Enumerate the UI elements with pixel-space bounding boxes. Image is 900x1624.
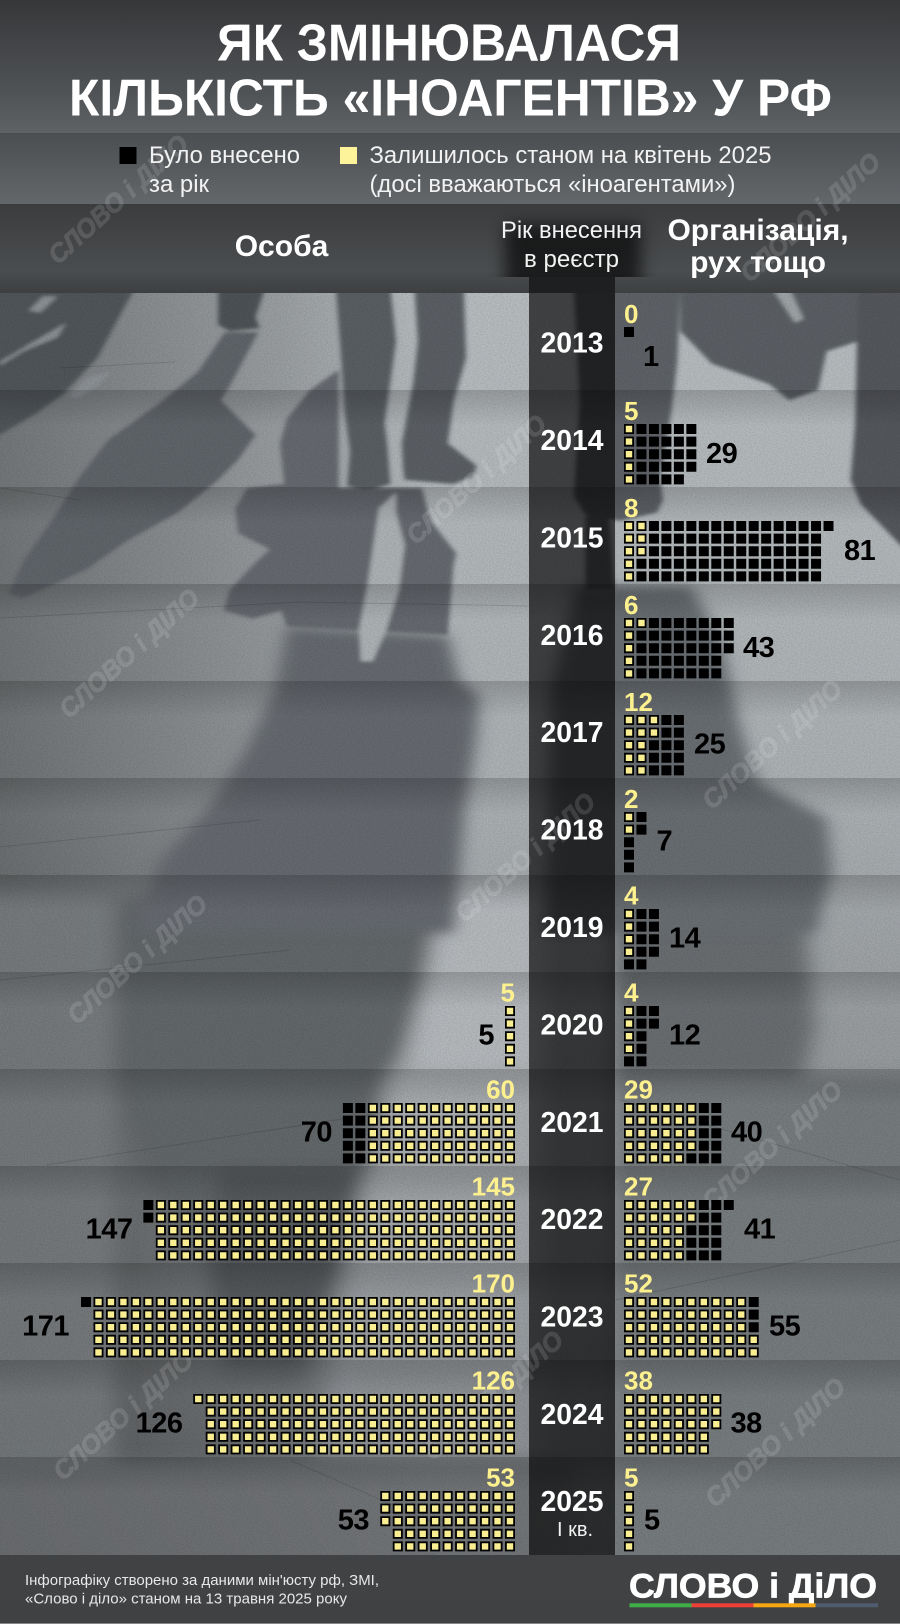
watermarks: СЛОВО і ДІЛО: [699, 1372, 851, 1513]
row 2021: 2021: [540, 1107, 604, 1139]
row 2021: 60: [486, 1074, 515, 1104]
persons squares 2021: [342, 1108, 515, 1158]
year column spine: [529, 293, 615, 1555]
row 2014: 2014: [540, 425, 604, 457]
row 2022: 27: [624, 1172, 653, 1202]
organisations squares 2018: [624, 817, 647, 867]
watermarks: СЛОВО і ДІЛО: [449, 787, 601, 928]
organisations squares 2023: [624, 1302, 759, 1352]
row 2013: 1: [643, 341, 659, 373]
row 2025 Q1: [338, 1462, 660, 1546]
organisations squares 2025: [624, 1496, 634, 1546]
row 2014: 5: [624, 396, 638, 426]
column header: person: Особа: [235, 230, 329, 263]
lower photo shadows: [0, 892, 900, 1582]
row 2023: 170: [472, 1268, 515, 1298]
row 2024: 126: [136, 1408, 183, 1440]
row 2017: 25: [694, 728, 726, 760]
title: КІЛЬКІСТЬ «ІНОАГЕНТІВ» У РФ: [69, 70, 832, 128]
watermarks: СЛОВО і ДІЛО: [42, 129, 194, 270]
column header: year of registry entry: Рік внесення: [501, 217, 642, 244]
row 2019: 2019: [540, 912, 604, 944]
organisations squares 2020: [624, 1011, 659, 1061]
legend: [120, 142, 772, 198]
row 2018: 2018: [540, 815, 604, 847]
persons squares 2025: [380, 1496, 515, 1546]
row 2025 Q1: 53: [486, 1462, 515, 1492]
organisations squares 2024: [624, 1399, 722, 1449]
legend panel background: [0, 133, 900, 204]
row 2021: 40: [731, 1116, 762, 1148]
row 2020: 4: [624, 978, 639, 1008]
footer source note: «Слово і діло» станом на 13 травня 2025 року: [25, 1590, 347, 1608]
row 2020: 5: [501, 978, 515, 1008]
title: ЯК ЗМІНЮВАЛАСЯ: [217, 14, 681, 72]
row 2013: [540, 299, 659, 373]
persons squares 2022: [143, 1205, 515, 1255]
legend key: remaining as of April 2025: (досі вважаються «іноагентами»): [370, 171, 736, 198]
title panel background: [0, 0, 900, 133]
row 2021: 29: [624, 1074, 653, 1104]
chart rows: [22, 299, 876, 1546]
row 2020: 5: [478, 1020, 494, 1052]
row 2020: 12: [669, 1020, 700, 1052]
row 2024: [136, 1366, 762, 1449]
row 2025 Q1: 2025: [540, 1486, 604, 1518]
row 2013: 0: [624, 299, 638, 329]
footer source note: Інфографіку створено за даними мін'юсту рф, ЗМІ,: [25, 1572, 379, 1589]
row 2022: 147: [86, 1214, 132, 1246]
row 2025 Q1: 5: [624, 1462, 638, 1492]
row 2016: 43: [743, 632, 775, 664]
row 2017: 12: [624, 687, 653, 717]
watermarks: СЛОВО і ДІЛО: [696, 1075, 848, 1216]
row 2015: [540, 493, 876, 576]
persons squares 2020: [504, 1011, 515, 1061]
pavement cracks: [0, 362, 900, 1530]
footer source note: [25, 1572, 379, 1608]
organisations squares 2014: [624, 429, 697, 479]
row 2024: 38: [730, 1408, 762, 1440]
column header: organisation: [667, 214, 849, 279]
row 2025 Q1: 5: [644, 1504, 660, 1536]
column header: organisation: рух тощо: [690, 246, 826, 279]
row 2022: 2022: [540, 1204, 604, 1236]
row 2019: [540, 880, 701, 964]
row 2017: [540, 687, 726, 770]
column header: year of registry entry: в реєстр: [524, 246, 619, 273]
watermarks: СЛОВО і ДІЛО: [696, 674, 848, 815]
watermarks: СЛОВО і ДІЛО: [53, 583, 205, 724]
row 2016: 6: [624, 590, 638, 620]
column header: organisation: Організація,: [667, 214, 849, 247]
soft central and right body shadows: [132, 586, 832, 933]
row 2025 Q1: І кв.: [557, 1519, 593, 1541]
background photo: shadows on pavement: [0, 288, 900, 1582]
persons squares 2023: [80, 1302, 515, 1352]
row 2025 Q1: 53: [338, 1504, 369, 1536]
row 2013: 2013: [540, 328, 604, 360]
row 2022: [86, 1172, 776, 1255]
legend key: remaining as of April 2025: [340, 142, 772, 198]
row 2022: 41: [744, 1214, 776, 1246]
row 2019: 14: [669, 922, 701, 954]
row 2016: [540, 590, 775, 673]
row 2017: 2017: [540, 717, 604, 749]
watermarks: [42, 129, 886, 1513]
persons squares 2024: [193, 1399, 515, 1449]
row 2018: [540, 784, 672, 867]
upper photo shadows: figures and legs: [0, 288, 900, 661]
row 2024: 38: [624, 1366, 653, 1396]
row 2021: [301, 1074, 762, 1158]
legend key: added during the year: за рік: [149, 171, 209, 198]
row 2016: 2016: [540, 620, 604, 652]
organisations squares 2015: [624, 526, 834, 576]
row 2018: 7: [656, 826, 672, 858]
organisations squares 2016: [624, 623, 734, 673]
row 2023: 52: [624, 1268, 653, 1298]
film grain: [0, 293, 900, 1555]
row shading bands: [0, 390, 900, 1493]
row 2018: 2: [624, 784, 638, 814]
legend key: remaining as of April 2025: Залишилось станом на квітень 2025: [370, 142, 772, 169]
column header: year of registry entry: [501, 217, 642, 273]
organisations squares 2019: [624, 914, 659, 964]
title: [69, 14, 832, 128]
row 2014: 29: [706, 438, 738, 470]
logo: Слово і Діло: СЛОВО і ДіЛО: [629, 1568, 877, 1606]
organisations squares 2022: [624, 1205, 734, 1255]
legend key: added during the year: Було внесено: [149, 142, 300, 169]
row 2021: 70: [301, 1116, 332, 1148]
row 2014: [540, 396, 738, 479]
organisations squares 2021: [624, 1108, 722, 1158]
organisations squares 2017: [624, 720, 684, 770]
row 2023: 171: [22, 1310, 69, 1342]
row 2022: 145: [472, 1172, 515, 1202]
organisations squares 2013: [624, 327, 634, 337]
row 2023: [22, 1268, 801, 1352]
row 2019: 4: [624, 880, 639, 910]
watermarks: СЛОВО і ДІЛО: [734, 147, 886, 288]
row 2024: 2024: [540, 1399, 604, 1431]
footer panel background: [0, 1555, 900, 1624]
watermarks: СЛОВО і ДІЛО: [400, 409, 552, 550]
row 2023: 55: [769, 1310, 801, 1342]
row 2024: 126: [472, 1366, 515, 1396]
watermarks: СЛОВО і ДІЛО: [61, 889, 213, 1030]
row 2020: [478, 978, 700, 1061]
watermarks: СЛОВО і ДІЛО: [417, 1325, 569, 1466]
row 2015: 81: [844, 535, 876, 567]
row 2023: 2023: [540, 1302, 604, 1334]
watermarks: СЛОВО і ДІЛО: [47, 1345, 199, 1486]
row 2015: 2015: [540, 522, 604, 554]
legend key: added during the year: [120, 142, 300, 198]
row 2020: 2020: [540, 1010, 604, 1042]
row 2015: 8: [624, 493, 638, 523]
column header panel background: [0, 204, 900, 293]
